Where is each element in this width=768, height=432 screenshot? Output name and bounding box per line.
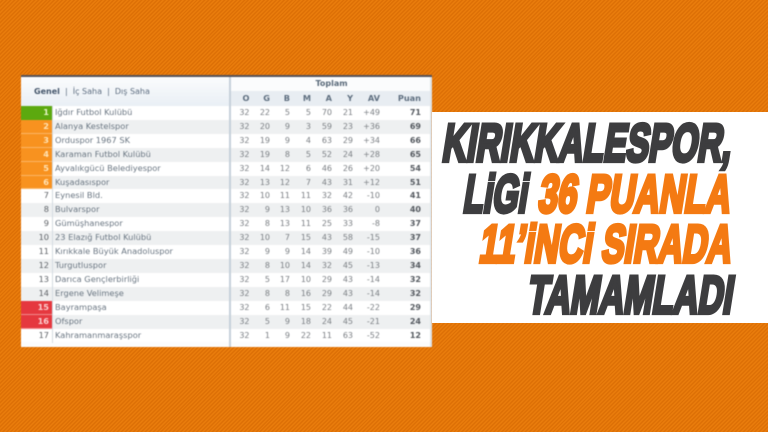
row 15: 44 — [343, 303, 353, 312]
row 9: 25 — [322, 219, 332, 228]
column group heading: Toplam: Toplam — [315, 79, 348, 88]
row 4 — [21, 148, 432, 162]
row 16: -21 — [367, 317, 380, 326]
row 15: Bayrampaşa — [55, 302, 107, 312]
row 15 — [21, 301, 432, 315]
panel: league standings table — [21, 75, 432, 347]
row 11: 9 — [265, 247, 270, 256]
row 7: 7 — [44, 190, 49, 200]
row 5: 26 — [343, 164, 353, 173]
row 3: 32 — [239, 136, 250, 145]
row 5: +20 — [363, 164, 380, 173]
row 6 — [21, 176, 432, 189]
row 11: 49 — [343, 247, 353, 256]
row 9: 11 — [301, 219, 311, 228]
row 2: Alanya Kestelspor — [55, 121, 129, 131]
row 12: 10 — [280, 261, 290, 270]
row 12: 34 — [410, 261, 421, 270]
row 5: 6 — [306, 164, 311, 173]
row 7: 32 — [322, 191, 332, 200]
row 15: 15 — [38, 302, 49, 312]
row 8: Bulvarspor — [55, 204, 100, 214]
row 13: 29 — [322, 275, 332, 284]
row 2: 2 — [43, 121, 49, 131]
row 1: 1 — [43, 107, 49, 117]
row 17: 32 — [239, 330, 250, 340]
column headers: Y — [347, 93, 353, 103]
row 2: 69 — [410, 122, 421, 131]
row 9: 8 — [265, 219, 270, 228]
row 14: 32 — [239, 289, 250, 298]
row 8: 40 — [410, 205, 421, 214]
column headers: Puan — [398, 93, 421, 103]
row 10: 43 — [322, 233, 332, 242]
row 2 — [21, 120, 432, 134]
row 16: 18 — [301, 317, 311, 326]
row 15: 6 — [265, 303, 270, 312]
column headers: O — [243, 93, 250, 103]
row 11: 39 — [322, 247, 332, 256]
row 16: 24 — [410, 317, 421, 326]
row 2: 59 — [322, 122, 332, 131]
row 3: 63 — [322, 136, 332, 145]
row 11: Kırıkkale Büyük Anadoluspor — [55, 246, 173, 256]
row 11: 9 — [285, 247, 290, 256]
row 13: 5 — [265, 275, 270, 284]
row 10 — [21, 231, 432, 245]
row 1: 5 — [285, 108, 290, 117]
row 1: +49 — [363, 108, 380, 117]
row 15: 29 — [410, 303, 421, 312]
row 6: 6 — [43, 177, 49, 187]
row 15: 15 — [301, 303, 311, 312]
row 1 — [21, 106, 432, 120]
row 7: 11 — [280, 191, 290, 200]
row 13: 10 — [301, 275, 311, 284]
row 16: 16 — [38, 316, 49, 326]
row 7: 42 — [343, 191, 353, 200]
row 5: 46 — [322, 164, 332, 173]
row 16 — [21, 315, 432, 328]
row 16: 5 — [265, 317, 270, 326]
row 7: -10 — [367, 191, 380, 200]
row 16: 9 — [285, 317, 290, 326]
column headers: A — [326, 93, 332, 103]
row 10: 15 — [301, 233, 311, 242]
row 11: 36 — [410, 247, 421, 256]
row 13: Darıca Gençlerbirliği — [55, 274, 139, 284]
row 4: 8 — [285, 150, 290, 159]
row 13: 32 — [410, 275, 421, 284]
row 3: 3 — [43, 135, 49, 145]
row 14: 8 — [265, 289, 270, 298]
row 6: 12 — [280, 178, 290, 187]
row 3: 9 — [285, 136, 290, 145]
row 15: 11 — [280, 303, 290, 312]
row 7: Eynesil Bld. — [55, 190, 103, 200]
row 12 — [21, 259, 432, 273]
row 9: 9 — [44, 218, 49, 228]
row 6: 13 — [260, 178, 270, 187]
column headers: M — [303, 93, 311, 103]
row 14: 14 — [39, 288, 49, 298]
row 13: 13 — [39, 274, 49, 284]
row 17: 11 — [322, 330, 332, 340]
row 8: 32 — [239, 205, 250, 214]
panel: white headline banner — [432, 112, 768, 323]
row 10: 10 — [39, 232, 49, 242]
row 17: 9 — [285, 330, 290, 340]
row 4: 4 — [43, 149, 49, 159]
row 1: 21 — [343, 108, 353, 117]
row 2: 20 — [260, 122, 270, 131]
row 14: 43 — [343, 289, 353, 298]
row 2: +36 — [363, 122, 380, 131]
row 9: -8 — [372, 219, 380, 228]
row 4: 52 — [322, 150, 332, 159]
row 10: 23 Elazığ Futbol Kulübü — [55, 232, 151, 242]
row 17: 1 — [265, 330, 270, 340]
table rows — [20, 105, 430, 340]
row 12: 45 — [343, 261, 353, 270]
row 17: -52 — [367, 330, 380, 340]
row 8 — [21, 203, 432, 217]
row 3: 66 — [410, 136, 421, 145]
row 9: Gümüşhanespor — [55, 218, 123, 228]
row 3: +34 — [363, 136, 380, 145]
row 16: 45 — [343, 317, 353, 326]
row 12: 14 — [301, 261, 311, 270]
row 14: 16 — [301, 289, 311, 298]
row 16: 32 — [239, 317, 250, 326]
row 10: 37 — [410, 233, 421, 242]
row 14: 32 — [410, 289, 421, 298]
row 9: 37 — [410, 219, 421, 228]
row 5 — [21, 162, 432, 176]
row 4: 24 — [343, 150, 353, 159]
row 8: 36 — [322, 205, 332, 214]
row 6: 32 — [239, 178, 250, 187]
row 12: 32 — [322, 261, 332, 270]
row 11: -10 — [367, 247, 380, 256]
row 13: 17 — [280, 275, 290, 284]
column headers: AV — [368, 93, 380, 103]
row 14: 8 — [285, 289, 290, 298]
row 8: 9 — [265, 205, 270, 214]
tab heading: Genel, İç Saha, Dış Saha: Genel | İç Saha | Dış Saha — [34, 87, 150, 96]
row 6: 7 — [306, 178, 311, 187]
row 1: 70 — [322, 108, 332, 117]
row 2: 23 — [343, 122, 353, 131]
row 17: 22 — [301, 330, 311, 340]
row 4: 19 — [260, 150, 270, 159]
row 3: 19 — [260, 136, 270, 145]
row 13: 43 — [343, 275, 353, 284]
row 5: Ayvalıkgücü Belediyespor — [55, 163, 161, 173]
row 7: 41 — [410, 191, 421, 200]
row 17 — [21, 328, 432, 342]
row 3: 29 — [343, 136, 353, 145]
row 4: 32 — [239, 150, 250, 159]
row 8: 10 — [301, 205, 311, 214]
row 5: 32 — [239, 164, 250, 173]
row 17: 17 — [39, 330, 49, 340]
row 10: -15 — [367, 233, 380, 242]
row 1: Iğdır Futbol Kulübü — [55, 107, 132, 117]
row 4: 5 — [306, 150, 311, 159]
row 6: 43 — [322, 178, 332, 187]
row 14: 29 — [322, 289, 332, 298]
row 10: 10 — [260, 233, 270, 242]
row 15: -22 — [367, 303, 380, 312]
row 12: 12 — [39, 260, 49, 270]
row 6: Kuşadasıspor — [55, 177, 109, 187]
row 4: +28 — [363, 150, 380, 159]
row 16: Ofspor — [55, 316, 82, 326]
row 1: 32 — [239, 108, 250, 117]
row 12: 32 — [239, 261, 250, 270]
row 6: +12 — [363, 178, 380, 187]
row 8: 8 — [44, 204, 49, 214]
column headers: B — [284, 93, 290, 103]
row 11: 14 — [301, 247, 311, 256]
row 9 — [21, 217, 432, 231]
row 14: -14 — [367, 289, 380, 298]
row 15: 22 — [322, 303, 332, 312]
row 9: 33 — [343, 219, 353, 228]
row 14: Ergene Velimeşe — [55, 288, 124, 298]
row 17: Kahramanmaraşspor — [55, 330, 141, 340]
row 2: 9 — [285, 122, 290, 131]
row 12: Turgutluspor — [55, 260, 106, 270]
headline line 2: LiGi: LiGi — [460, 165, 533, 224]
row 11: 32 — [239, 247, 250, 256]
row 8: 36 — [343, 205, 353, 214]
row 10: 58 — [343, 233, 353, 242]
row 7: 10 — [260, 191, 270, 200]
row 14 — [21, 287, 432, 301]
row 9: 13 — [280, 219, 290, 228]
row 10: 7 — [285, 233, 290, 242]
row 7: 32 — [239, 191, 250, 200]
row 13: -14 — [367, 275, 380, 284]
row 13 — [21, 273, 432, 287]
row 6: 31 — [343, 178, 353, 187]
row 12: -13 — [367, 261, 380, 270]
row 12: 8 — [265, 261, 270, 270]
row 1: 5 — [306, 108, 311, 117]
row 11 — [21, 245, 432, 259]
row 3 — [21, 134, 432, 148]
row 7 — [21, 189, 432, 203]
row 2: 3 — [306, 122, 311, 131]
row 8: 0 — [375, 205, 380, 214]
row 4: Karaman Futbol Kulübü — [55, 149, 151, 159]
row 8: 13 — [280, 205, 290, 214]
column headers: G — [263, 93, 270, 103]
row 13: 32 — [239, 275, 250, 284]
row 5: 14 — [260, 164, 270, 173]
row 5: 12 — [280, 164, 290, 173]
row 15: 32 — [239, 303, 250, 312]
row 2: 32 — [239, 122, 250, 131]
column headers — [231, 91, 432, 106]
row 3: 4 — [306, 136, 311, 145]
row 4: 65 — [410, 150, 421, 159]
row 16: 24 — [322, 317, 332, 326]
row 5: 5 — [43, 163, 49, 173]
row 9: 32 — [239, 219, 250, 228]
row 1: 71 — [410, 108, 421, 117]
row 3: Orduspor 1967 SK — [55, 135, 130, 145]
row 5: 54 — [410, 164, 421, 173]
tab heading: Genel, İç Saha, Dış Saha — [21, 77, 229, 106]
row 17: 63 — [343, 330, 353, 340]
row 7: 11 — [301, 191, 311, 200]
row 1: 22 — [260, 108, 270, 117]
row 10: 32 — [239, 233, 250, 242]
row 11: 11 — [39, 246, 49, 256]
row 17: 12 — [410, 330, 421, 340]
row 6: 51 — [410, 178, 421, 187]
